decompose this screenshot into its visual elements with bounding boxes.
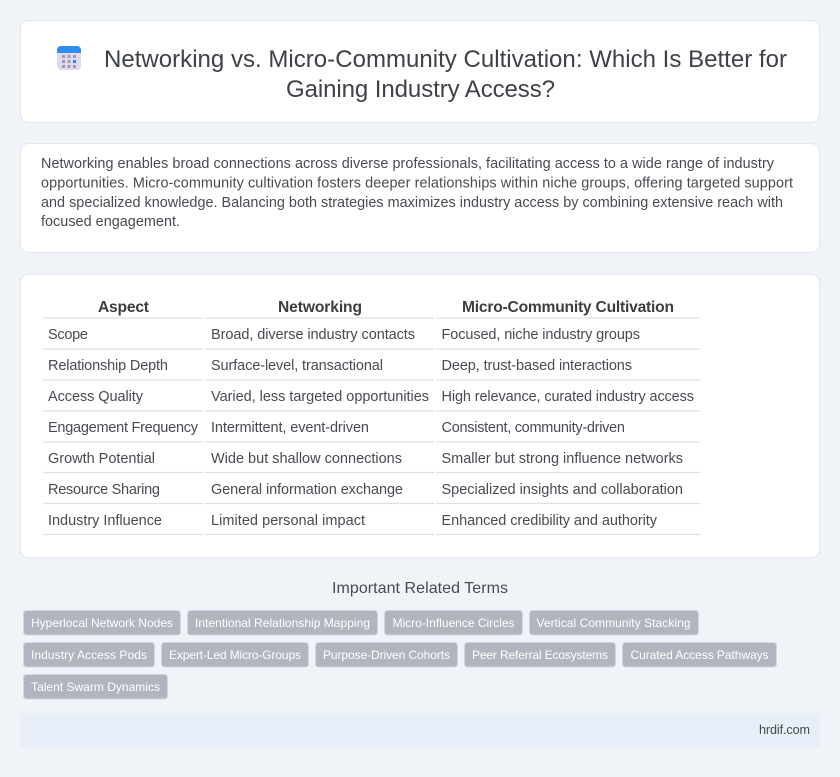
row: engagement frequency: Consistent, community-driven (442, 420, 625, 436)
pill (316, 642, 458, 667)
row: resource sharing: Resource Sharing (48, 482, 160, 498)
icon: calendar grid (57, 46, 81, 70)
row: engagement frequency (48, 420, 625, 436)
row: growth potential: Smaller but strong influence networks (442, 451, 683, 467)
related term pills (24, 610, 776, 699)
row: resource sharing: General information exchange (211, 482, 403, 498)
pill: Curated Access Pathways (630, 648, 768, 662)
footer (20, 713, 820, 747)
row: relationship depth: Surface-level, transactional (211, 358, 383, 374)
row: industry influence (48, 513, 658, 529)
pill (384, 610, 522, 635)
row: engagement frequency: Engagement Frequency (48, 420, 199, 436)
row: scope: Focused, niche industry groups (442, 327, 640, 343)
row: relationship depth: Deep, trust-based interactions (442, 358, 632, 374)
row: access quality: Access Quality (48, 389, 144, 405)
row: relationship depth (48, 358, 632, 374)
row: industry influence: Industry Influence (48, 513, 162, 529)
pill: Industry Access Pods (31, 648, 147, 662)
pill: Hyperlocal Network Nodes (31, 616, 173, 630)
row: growth potential: Wide but shallow connections (211, 451, 402, 467)
panel: description (20, 144, 820, 252)
pill: Vertical Community Stacking (536, 616, 690, 630)
pill (24, 610, 180, 635)
description text: opportunities. Micro-community cultivation fosters deeper relationships within niche groups, offering targeted support (41, 176, 793, 192)
table header: Networking (278, 299, 362, 316)
title text: Gaining Industry Access? (286, 76, 555, 103)
pill (530, 610, 698, 635)
description text: and specialized knowledge. Balancing both strategies maximizes industry access by combining extensive reach with (41, 195, 783, 211)
description text: Networking enables broad connections across diverse professionals, facilitating access to a wide range of industry (41, 156, 775, 172)
pill (24, 642, 154, 667)
panel: comparison table (20, 274, 820, 558)
title panel (20, 20, 820, 122)
row: relationship depth: Relationship Depth (48, 358, 168, 374)
title text: Networking vs. Micro-Community Cultivation: Which Is Better for (104, 46, 787, 73)
row: engagement frequency: Intermittent, event-driven (211, 420, 369, 436)
row: scope: Scope (48, 327, 88, 343)
pill: Expert-Led Micro-Groups (169, 648, 301, 662)
row: access quality: Varied, less targeted opportunities (211, 389, 429, 405)
pill: Purpose-Driven Cohorts (323, 648, 450, 662)
heading: important related terms: Important Related Terms (332, 580, 508, 597)
table header (98, 299, 674, 316)
row: resource sharing (48, 482, 683, 498)
row: access quality: High relevance, curated industry access (442, 389, 694, 405)
row: scope: Broad, diverse industry contacts (211, 327, 415, 343)
row: resource sharing: Specialized insights and collaboration (442, 482, 683, 498)
pill: Intentional Relationship Mapping (195, 616, 370, 630)
description text: focused engagement. (41, 214, 180, 230)
pill (24, 674, 168, 699)
table header: Aspect (98, 299, 149, 316)
pill (162, 642, 308, 667)
row: industry influence: Limited personal impact (211, 513, 365, 529)
pill: Talent Swarm Dynamics (31, 680, 160, 694)
pill (188, 610, 378, 635)
pill: Micro-Influence Circles (392, 616, 514, 630)
footer source text: hrdif.com (759, 723, 810, 737)
row: growth potential: Growth Potential (48, 451, 155, 467)
row: access quality (48, 389, 694, 405)
pill: Peer Referral Ecosystems (472, 648, 608, 662)
table header: Micro-Community Cultivation (462, 299, 674, 316)
row: growth potential (48, 451, 683, 467)
row: industry influence: Enhanced credibility and authority (442, 513, 658, 529)
pill (464, 642, 616, 667)
row: scope (48, 327, 640, 343)
pill (622, 642, 776, 667)
